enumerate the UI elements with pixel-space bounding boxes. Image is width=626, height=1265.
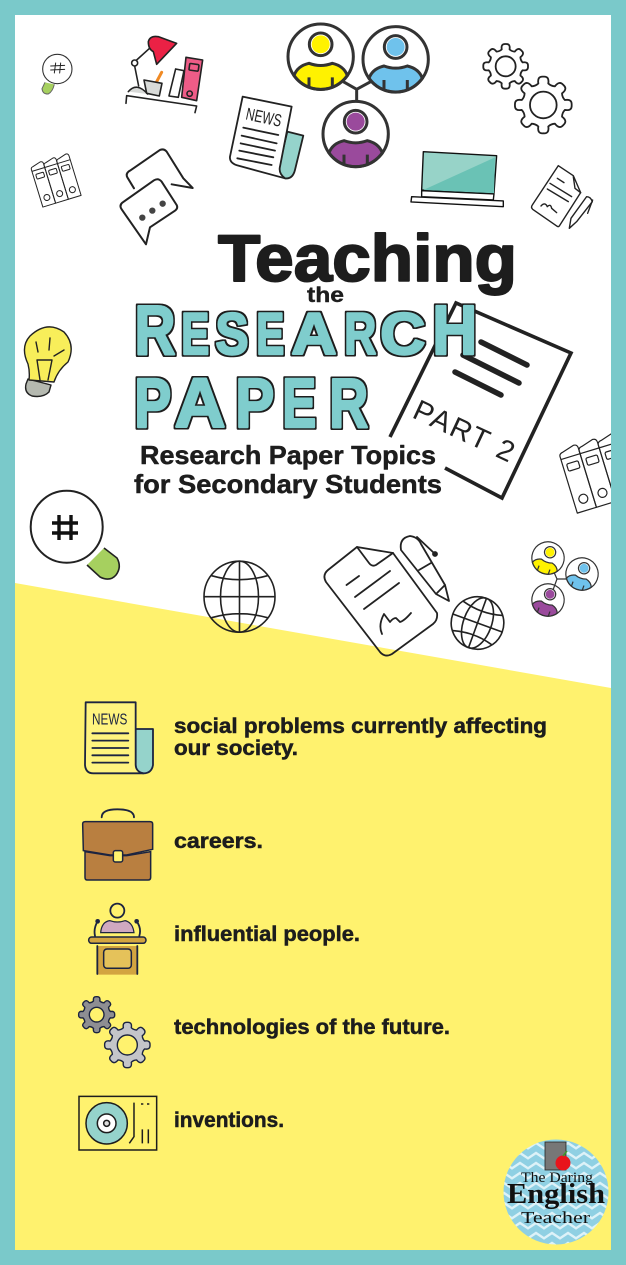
icon: small connected people xyxy=(527,537,603,621)
icon: composition notebook xyxy=(545,1142,566,1170)
title: Teaching: Teaching xyxy=(218,221,517,295)
logo text: English xyxy=(507,1179,605,1210)
icon: briefcase xyxy=(83,809,153,880)
title: RESEARCH: C xyxy=(380,302,425,367)
icon: binders right xyxy=(558,432,626,513)
part 2 label: PART 2 xyxy=(408,394,519,469)
title: PAPER: R xyxy=(329,364,368,442)
title: PAPER: P xyxy=(134,364,171,442)
icon: large magnifier xyxy=(31,491,119,579)
title: PAPER: P xyxy=(235,364,274,442)
icon: newspaper: NEWS xyxy=(244,104,284,131)
subtitle: Research Paper Topics xyxy=(140,440,436,470)
icon: newspaper xyxy=(85,702,153,773)
logo text: The Daring xyxy=(521,1170,594,1186)
icon: apple xyxy=(556,1151,570,1170)
icon: binders top left xyxy=(30,153,81,207)
icon: speech bubbles xyxy=(120,149,193,244)
list item 3: influential people xyxy=(89,904,360,975)
title: RESEARCH: E xyxy=(181,302,209,367)
title: the: the xyxy=(307,284,344,307)
icon: record player xyxy=(79,1096,157,1150)
title: RESEARCH: H xyxy=(432,291,477,369)
icon: desk lamp and shelf xyxy=(126,36,203,113)
text: inventions. xyxy=(174,1109,284,1132)
logo text: Teacher xyxy=(521,1208,590,1227)
title: RESEARCH: E xyxy=(256,302,284,367)
icon: laptop xyxy=(411,152,503,207)
yellow diagonal panel xyxy=(15,583,611,1250)
list item 2: careers xyxy=(83,809,263,880)
icon: podium speaker xyxy=(89,904,146,975)
icon: newspaper xyxy=(230,97,303,178)
title: PAPER: A xyxy=(174,364,226,442)
title: PAPER xyxy=(134,364,368,442)
text: our society. xyxy=(174,737,298,760)
icon: globe small xyxy=(444,589,511,657)
subtitle xyxy=(134,440,442,499)
title: RESEARCH xyxy=(134,291,477,369)
text: influential people. xyxy=(174,923,360,946)
icon: gears xyxy=(79,997,150,1068)
logo: The Daring English Teacher xyxy=(504,1140,608,1244)
icon: three connected people xyxy=(288,24,428,167)
title: RESEARCH: R xyxy=(134,291,176,369)
title: RESEARCH: A xyxy=(292,302,336,367)
text: technologies of the future. xyxy=(174,1016,450,1039)
title: PAPER: E xyxy=(282,364,316,442)
text: social problems currently affecting xyxy=(174,715,547,738)
icon: signed document small xyxy=(532,166,593,228)
text: careers. xyxy=(174,830,263,853)
logo text xyxy=(507,1170,605,1227)
icon: newspaper: NEWS xyxy=(92,711,127,728)
icon: lightbulb xyxy=(24,327,71,396)
subtitle: for Secondary Students xyxy=(134,469,442,499)
list item 5: inventions xyxy=(79,1096,284,1150)
title: RESEARCH: R xyxy=(344,302,376,367)
icon: signed document with pen xyxy=(324,536,449,656)
list item 1: social problems xyxy=(85,702,547,773)
icon: small magnifier xyxy=(42,54,72,94)
icon: document with PART 2 xyxy=(390,303,571,498)
icon: gears xyxy=(483,44,572,133)
title: RESEARCH: S xyxy=(216,302,248,367)
list item 4: technologies xyxy=(79,997,450,1068)
icon: globe large xyxy=(204,561,275,632)
